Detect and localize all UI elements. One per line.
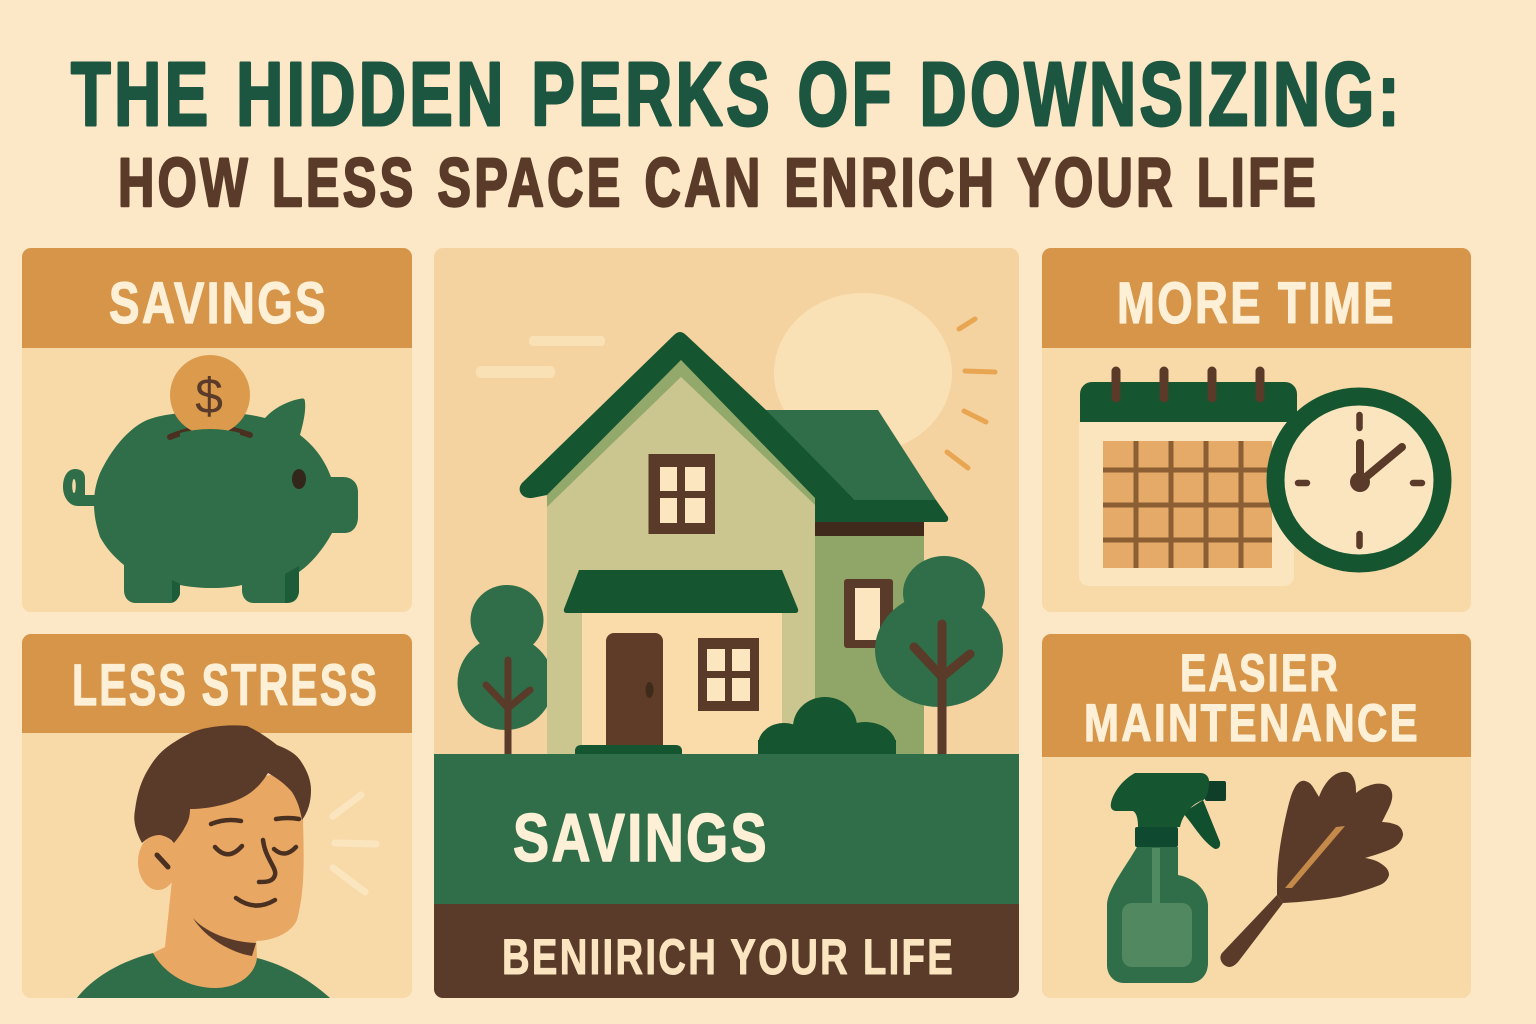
icon: piggy bank: $ [195,368,223,424]
bush [758,697,896,768]
brown footer band [434,904,1019,998]
icon: feather duster [1220,772,1403,967]
panel: center house illustration [434,248,1019,998]
easier maintenance heading: EASIER [1180,644,1340,703]
icon: spray bottle [1107,773,1226,983]
green banner [434,754,1019,904]
less stress heading: LESS STRESS [72,653,379,718]
panel: less stress [22,634,412,998]
banner heading: SAVINGS [513,800,769,876]
house [520,332,948,754]
less stress header band [22,634,412,733]
savings heading: SAVINGS [109,271,328,336]
left tree [458,585,554,754]
more time heading: MORE TIME [1117,271,1396,336]
icon: clock [1276,396,1442,564]
right tree [875,556,1003,754]
panel: savings [22,248,412,612]
sun [774,293,995,468]
more time header band [1042,248,1471,348]
icon: calm person [77,725,376,998]
footer text: BENIIRICH YOUR LIFE [502,929,955,985]
clouds [476,336,605,378]
easier maintenance heading [1084,644,1420,753]
panel: more time [1042,248,1471,612]
easier maintenance heading: MAINTENANCE [1084,694,1420,753]
easier maintenance header band [1042,634,1471,757]
icon: piggy bank [63,355,358,603]
icon: calendar [1079,371,1297,586]
panel: easier maintenance [1042,634,1471,998]
savings header band [22,248,412,348]
